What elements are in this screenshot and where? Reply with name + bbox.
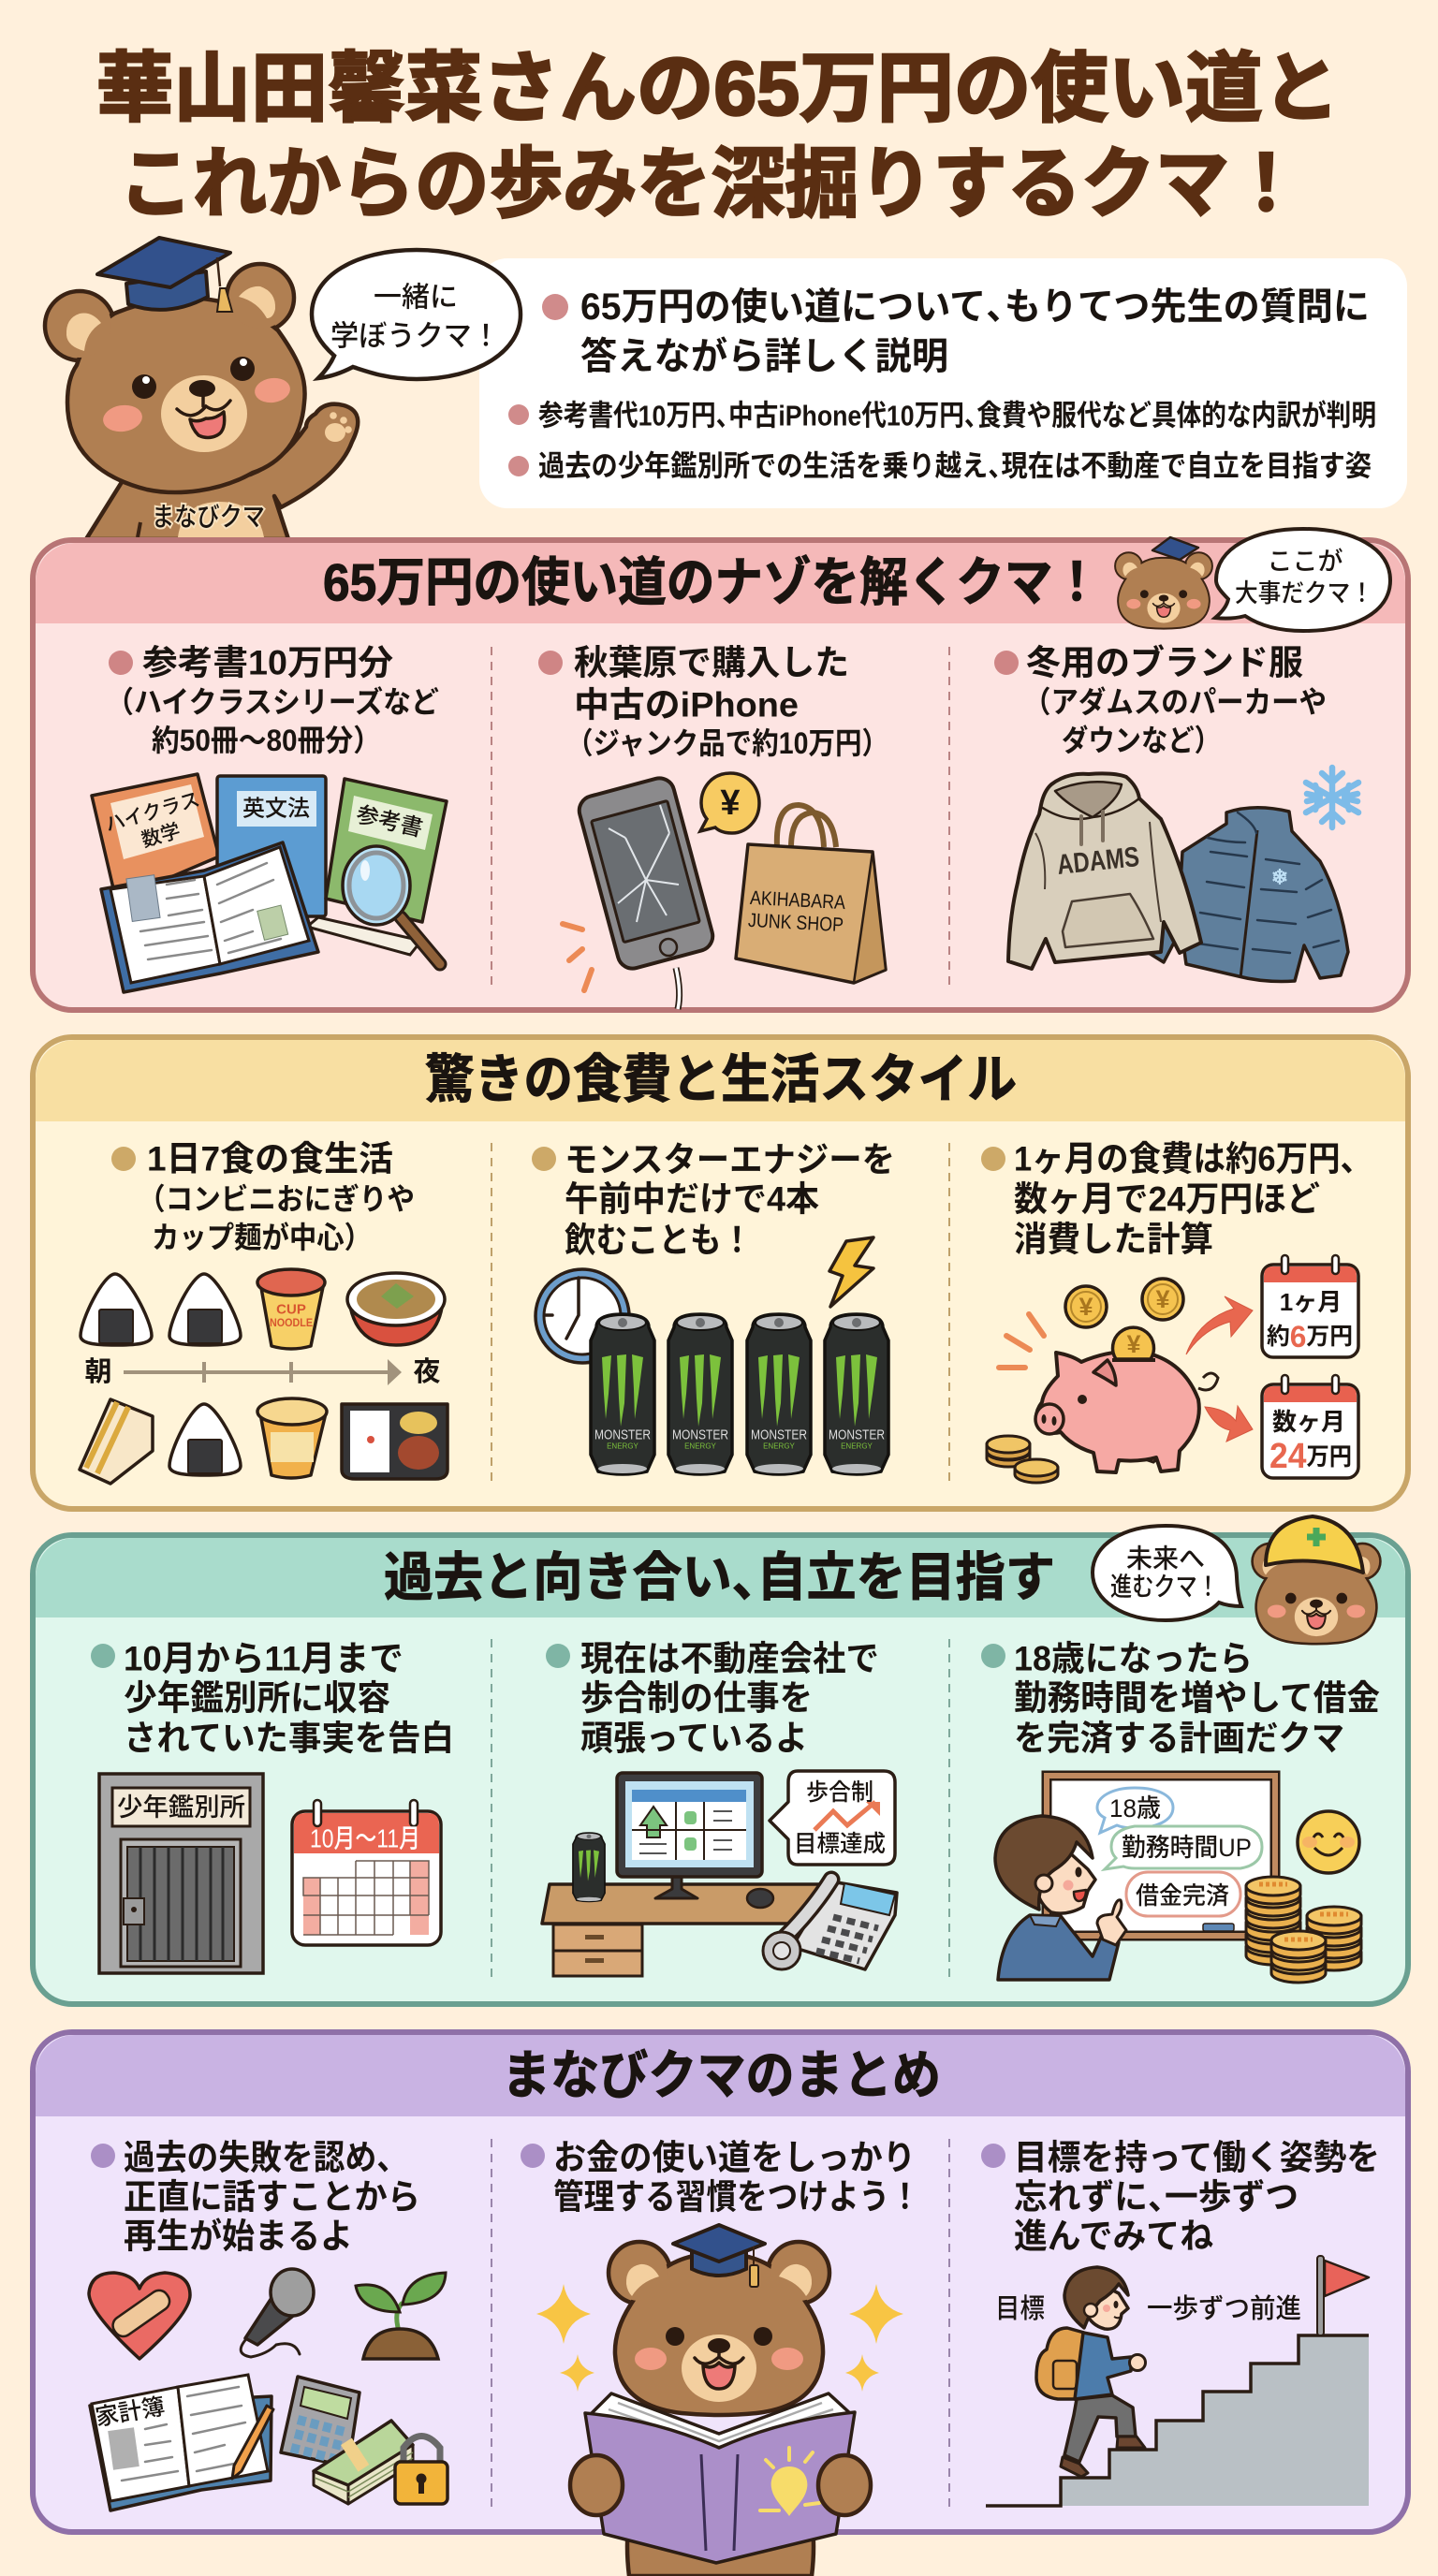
column 2 icon: shopping bag: JUNK SHOP (747, 910, 844, 936)
speech bubble: 一緒に学ぼうクマ (312, 250, 521, 379)
icon: calendar 10月〜11月: 10月〜11月 (310, 1823, 420, 1853)
icon: wall clock (536, 1269, 629, 1363)
column 2 icon: cracked iPhone (563, 775, 716, 1009)
column 2 text (521, 2138, 920, 2217)
column 1 text: されていた事実を告白 (124, 1719, 454, 1758)
speech box: 歩合制 目標達成: 歩合制 (806, 1779, 873, 1806)
heading: 65万円の使い道のナゾを解くクマ！ (323, 552, 1101, 612)
open purple book (585, 2393, 855, 2563)
mascot: manabi bear waving (45, 238, 358, 539)
sparkles (536, 2284, 903, 2392)
heading: 驚きの食費と生活スタイル (425, 1050, 1017, 1108)
icon: whiteboard plan (1047, 1776, 1275, 1936)
panel: 65万円の使い道のナゾ (33, 529, 1408, 1010)
icon: calculator (281, 2377, 360, 2466)
bubble: 18歳: 18歳 (1109, 1794, 1161, 1822)
speech bubble: ここが大事だクマ: 大事だクマ！ (1235, 579, 1373, 607)
column 1 icon: books and magnifier (92, 774, 447, 992)
food row: morning to noon: NOODLE (270, 1316, 313, 1329)
speech bubble: 未来へ進むクマ: 未来へ (1126, 1544, 1205, 1573)
title: これからの歩みを深掘りするクマ！ (119, 142, 1303, 227)
column 2 text: （ジャンク品で約10万円） (566, 726, 888, 760)
column 2 text (538, 644, 888, 760)
panel: まなびクマのまとめ (33, 2032, 1408, 2576)
column 3 text: 消費した計算 (1014, 1221, 1213, 1258)
column 2 icon: shopping bag (736, 805, 886, 983)
title (96, 47, 1340, 227)
column 2 icon: shopping bag: AKIHABARA (749, 887, 846, 914)
speech bubble: ここが大事だクマ: ここが (1268, 548, 1343, 576)
calendar: 数ヶ月 24万円: 数ヶ月 (1272, 1408, 1345, 1436)
column 2 text: 飲むことも！ (565, 1221, 753, 1260)
calendar: 数ヶ月 24万円: 24万円 (1269, 1437, 1352, 1476)
icon: smiley (1298, 1811, 1359, 1873)
speech bubble: ここが大事だクマ (1215, 529, 1390, 631)
timeline: morning to night: 朝 (84, 1356, 112, 1387)
intro bullet 1: 答えながら詳しく説明 (580, 336, 948, 377)
icon: hiker climbing (1036, 2267, 1146, 2477)
column 1 icon: books and magnifier: 参考書 (354, 802, 425, 842)
column 2 icon: yen bubble: ¥ (720, 783, 741, 823)
speech bubble: 一緒に学ぼうクマ: 一緒に (374, 283, 458, 313)
bubble: 勤務時間UP: 勤務時間UP (1122, 1834, 1252, 1862)
icon: four energy drink cans: MONSTER (672, 1427, 728, 1443)
arrows to calendars (1186, 1296, 1253, 1442)
calendar: 1ヶ月 約6万円: 約6万円 (1267, 1320, 1353, 1354)
icon: office desk with PC (542, 1773, 897, 1976)
column 1 text: 過去の失敗を認め、 (124, 2138, 408, 2177)
bear with hard hat (1253, 1516, 1380, 1644)
icon: goal flag (1317, 2256, 1369, 2335)
speech box: 歩合制 目標達成 (770, 1771, 895, 1865)
column 1 text: 少年鑑別所に収容 (124, 1679, 390, 1717)
desk telephone (763, 1880, 897, 1969)
column 2 text: 中古のiPhone (574, 685, 799, 724)
icon: lightning (829, 1237, 873, 1307)
intro panel (479, 258, 1407, 508)
column 2 text: 頑張っているよ (580, 1719, 808, 1758)
icon: heart with bandage (89, 2273, 190, 2359)
icon: staircase (986, 2335, 1369, 2506)
calendar: 1ヶ月 約6万円 (1262, 1255, 1358, 1357)
column 1 text (111, 1140, 415, 1254)
speech bubble: 一緒に学ぼうクマ: 学ぼうクマ！ (330, 320, 500, 352)
column 3 text: 勤務時間を増やして借金 (1014, 1679, 1380, 1717)
column 3 text: （アダムスのパーカーや (1023, 685, 1327, 719)
column 1 icon: books and magnifier: 数学 (139, 820, 183, 852)
icon: four energy drink cans: MONSTER (594, 1427, 651, 1443)
column 3 icon: snowflake (1306, 768, 1358, 827)
icon: household account book and pencil (90, 2375, 273, 2510)
column 2 text: お金の使い道をしっかり (553, 2138, 916, 2177)
mascot: manabi bear waving: まなびクマ (152, 502, 265, 532)
intro bullet 1 (542, 286, 1370, 377)
column 3 text (981, 1640, 1380, 1758)
column 2 text: 午前中だけで4本 (565, 1179, 819, 1219)
column 2 text: モンスターエナジーを (565, 1140, 895, 1179)
column 1 text (91, 2138, 420, 2256)
big bear reading a book (570, 2225, 871, 2576)
column 1 text (106, 644, 439, 757)
food row: noon to night (80, 1398, 448, 1484)
icon: padlock (395, 2436, 448, 2504)
column 2 text: 歩合制の仕事を (580, 1679, 813, 1717)
column 3 text: 数ヶ月で24万円ほど (1014, 1179, 1320, 1219)
column 3 text: 忘れずに、一歩ずつ (1014, 2177, 1299, 2217)
column 2 text (546, 1640, 879, 1758)
column 1 text: （コンビニおにぎりや (138, 1182, 415, 1216)
food row: morning to noon: CUP (276, 1301, 306, 1318)
icon: four energy drink cans: ENERGY (607, 1442, 639, 1451)
column 3 text: 進んでみてね (1014, 2217, 1213, 2256)
column 3 text: 1ヶ月の食費は約6万円、 (1014, 1140, 1372, 1178)
calendar: 1ヶ月 約6万円: 1ヶ月 (1280, 1288, 1342, 1316)
icon: four energy drink cans: ENERGY (684, 1442, 717, 1451)
mini bear with cap (1115, 537, 1212, 629)
column 3 icon: jacket (1149, 808, 1348, 981)
icon: four energy drink cans: ENERGY (841, 1442, 873, 1451)
intro bullet 3: 過去の少年鑑別所での生活を乗り越え、現在は不動産で自立を目指す姿 (538, 449, 1372, 483)
column 1 text: 参考書10万円分 (142, 644, 393, 681)
speech bubble: 未来へ進むクマ (1093, 1526, 1241, 1620)
column 1 text: 1日7食の食生活 (147, 1140, 393, 1178)
column 1 icon: books and magnifier: ハイクラス (103, 789, 202, 836)
column 3 text (981, 1140, 1372, 1258)
column 3 text: ダウンなど） (1062, 724, 1221, 757)
column 3 icon: hoodie: ADAMS (1056, 842, 1140, 881)
column 2 icon: yen bubble (700, 773, 759, 833)
speech bubble: 未来へ進むクマ: 進むクマ！ (1110, 1573, 1219, 1601)
icon: piggy bank with coins: ¥ (1126, 1330, 1141, 1358)
heading: 過去と向き合い、自立を目指す (384, 1548, 1055, 1606)
column 3 icon: hoodie (1008, 773, 1201, 969)
column 3 text: 目標を持って働く姿勢を (1014, 2138, 1380, 2177)
title: 華山田馨菜さんの65万円の使い道と (96, 47, 1340, 131)
column 2 text (532, 1140, 895, 1260)
panel: 驚きの食費と生活スタイル (33, 1037, 1408, 1509)
heading: まなびクマのまとめ (502, 2046, 941, 2104)
icon: four energy drink cans: MONSTER (751, 1427, 807, 1443)
column 1 text: 再生が始まるよ (124, 2217, 353, 2256)
bubble: 借金完済: 借金完済 (1136, 1881, 1229, 1910)
column 1 text: 正直に話すことから (124, 2177, 420, 2217)
icon: detention centre door: 少年鑑別所 (117, 1793, 245, 1822)
intro bullet 2: 参考書代10万円、中古iPhone代10万円、食費や服代など具体的な内訳が判明 (538, 399, 1376, 432)
column 1 text: カップ麺が中心） (152, 1221, 372, 1254)
column 3 text: 冬用のブランド服 (1026, 642, 1303, 681)
column 2 text: 現在は不動産会社で (580, 1640, 879, 1677)
column 3 text (981, 2138, 1380, 2256)
bubble: 借金完済 (1126, 1872, 1240, 1916)
column 3 text: 18歳になったら (1014, 1640, 1253, 1677)
icon: four energy drink cans: ENERGY (763, 1442, 796, 1451)
column 3 icon: jacket: ❄ (1271, 865, 1288, 889)
speech box: 歩合制 目標達成: 目標達成 (794, 1831, 886, 1857)
bubble: 勤務時間UP (1105, 1826, 1262, 1869)
timeline: morning to night: 夜 (413, 1356, 441, 1387)
panel: 過去と向き合い、自立を目指す (33, 1516, 1408, 2004)
column 2 text: 秋葉原で購入した (574, 644, 849, 681)
column 2 text: 管理する習慣をつけよう！ (553, 2177, 920, 2217)
icon: coin stacks (1246, 1877, 1361, 1983)
intro bullet 1: 65万円の使い道について、もりてつ先生の質問に (580, 286, 1370, 328)
icon: detention centre door (99, 1774, 263, 1973)
icon: money stack (314, 2421, 413, 2504)
icon: piggy bank with coins: ¥ (1155, 1285, 1170, 1313)
column 3 text (994, 642, 1327, 757)
column 1 text: （ハイクラスシリーズなど (106, 685, 439, 719)
column 3 text: を完済する計画だクマ (1014, 1719, 1344, 1758)
icon: household account book and pencil: 家計簿 (94, 2393, 167, 2431)
column 1 icon: books and magnifier: 英文法 (242, 796, 310, 822)
icon: sprout (356, 2273, 446, 2359)
icon: person pointing (995, 1816, 1126, 1980)
bubble: 18歳 (1097, 1788, 1173, 1833)
column 1 text: 10月から11月まで (124, 1640, 404, 1677)
icon: piggy bank with coins (987, 1279, 1218, 1483)
icon: microphone (241, 2269, 314, 2357)
icon: piggy bank with coins: ¥ (1078, 1293, 1093, 1321)
icon: four energy drink cans (591, 1314, 888, 1474)
timeline: morning to night (84, 1356, 441, 1387)
label: 一歩ずつ前進: 一歩ずつ前進 (1147, 2293, 1301, 2324)
label: 目標: 目標 (995, 2293, 1045, 2324)
column 1 text: 約50冊〜80冊分） (152, 724, 381, 757)
icon: four energy drink cans: MONSTER (829, 1427, 885, 1443)
column 1 text (91, 1640, 454, 1758)
food row: morning to noon (81, 1269, 445, 1349)
icon: calendar 10月〜11月 (292, 1800, 441, 1945)
calendar: 数ヶ月 24万円 (1262, 1375, 1358, 1478)
